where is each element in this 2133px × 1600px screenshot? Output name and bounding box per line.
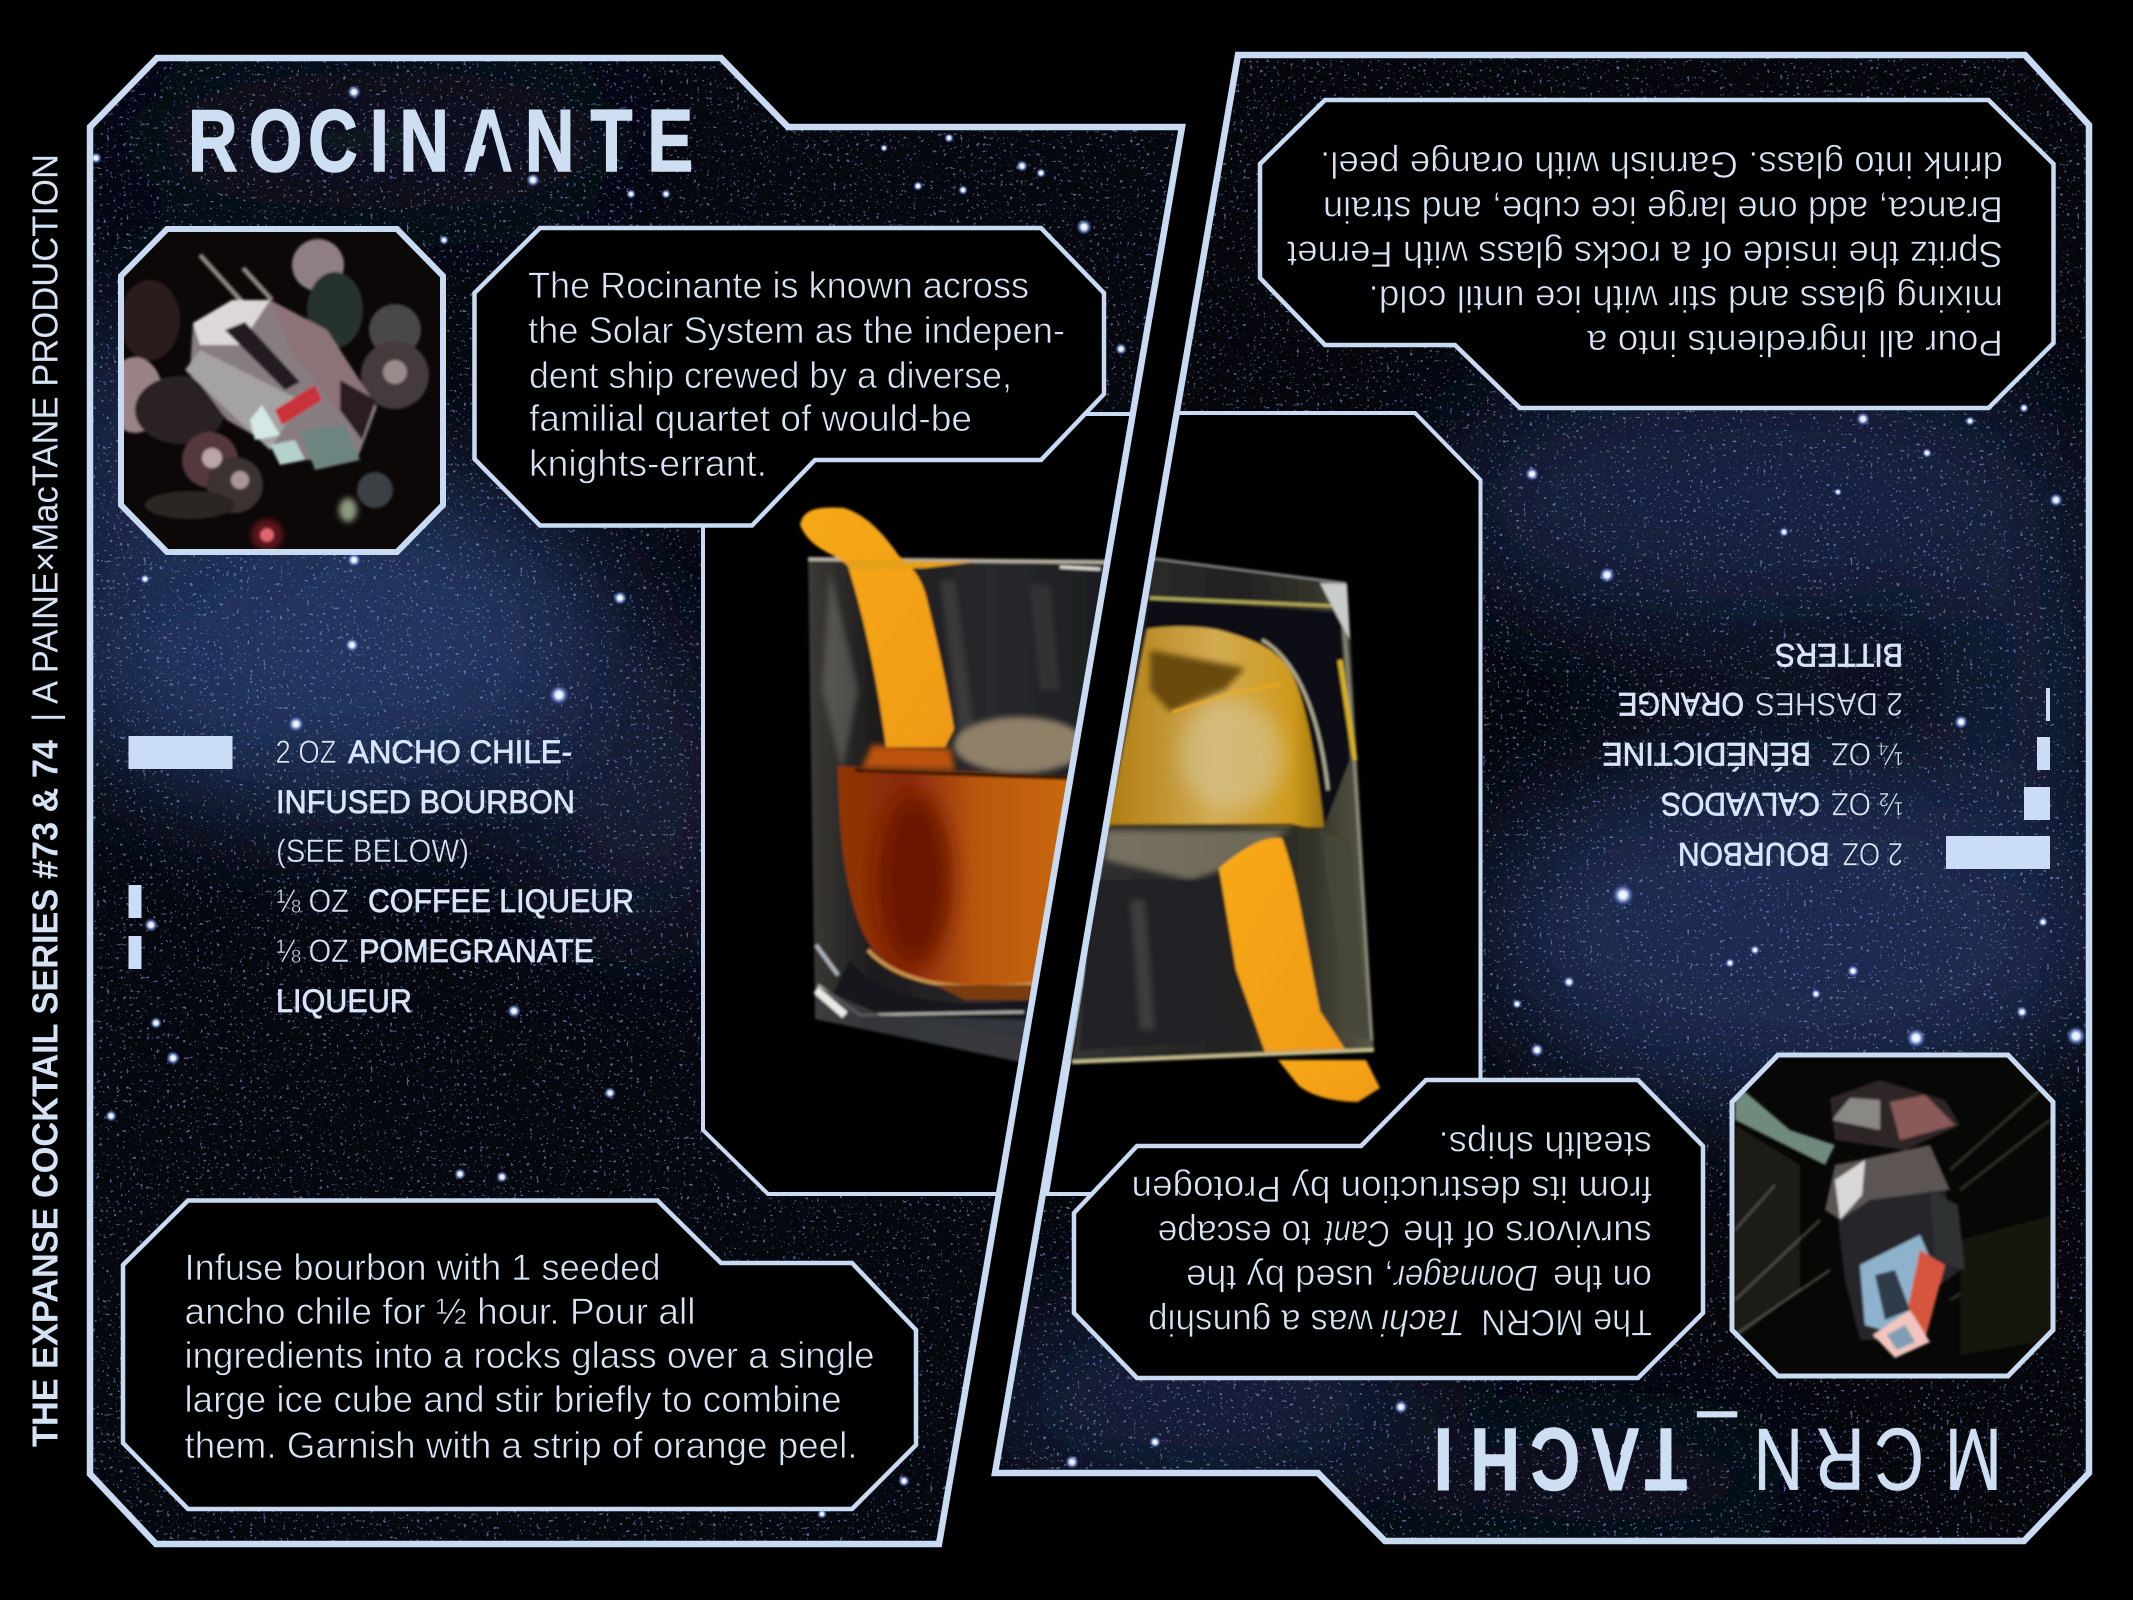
- photo: MCRN Tachi ship: [1732, 1055, 2053, 1376]
- glass base: [834, 962, 1028, 1022]
- ingredient list: Rocinante: ANCHO CHILE-: [348, 734, 572, 770]
- callout: Rocinante description: knights-errant.: [529, 443, 767, 484]
- ingredient list: Tachi (inverted): [1602, 637, 1903, 872]
- callout: Rocinante description: [474, 228, 1104, 526]
- panel: Rocinante starfield: [50, 50, 1190, 1550]
- callout: Rocinante recipe: ingredients into a rocks glass over a single: [184, 1335, 874, 1376]
- hull: [190, 300, 377, 460]
- callout: Tachi description (inverted): survivors of the: [1403, 1213, 1652, 1254]
- ingredient list: Tachi (inverted): ORANGE: [1618, 686, 1744, 722]
- photo: Rocinante ship: [107, 229, 443, 552]
- panel outline: Rocinante: [90, 58, 1182, 1544]
- title: MCRN_TACHI (inverted): TACHI: [1434, 1410, 1687, 1508]
- callout: Rocinante recipe: them. Garnish with a strip of orange peel.: [184, 1425, 858, 1466]
- callout: Tachi recipe (inverted): Pour all ingredients into a: [1587, 322, 2003, 364]
- title: ROCINANTE: ROCINANTE: [188, 92, 693, 190]
- ice above liquid: [954, 717, 1086, 773]
- hangar structure: [1735, 1083, 1835, 1165]
- callout: Rocinante description: dent ship crewed by a diverse,: [529, 355, 1012, 396]
- ingredient list: Tachi (inverted): BÉNÉDICTINE: [1602, 736, 1811, 772]
- callout: Tachi recipe (inverted): mixing glass and stir with ice until cold.: [1368, 278, 2003, 319]
- callout: Tachi description (inverted): Donnager: [1393, 1258, 1538, 1298]
- callout: Rocinante recipe: ancho chile for ½ hour. Pour all: [184, 1291, 696, 1332]
- ingredient list: Tachi (inverted): BOURBON: [1678, 836, 1830, 872]
- vertical credit line: THE EXPANSE COCKTAIL SERIES #73 & 74: [24, 740, 66, 1447]
- ingredient list: Rocinante: 2 OZ: [276, 734, 336, 770]
- amber liquid and ice: [1108, 627, 1324, 827]
- ingredient proportion bars: Rocinante: [128, 736, 232, 969]
- orange peel: [800, 508, 954, 747]
- callout: Tachi description (inverted): from its destruction by Protogen: [1132, 1168, 1652, 1210]
- title: MCRN_TACHI (inverted): MCRN_: [1697, 1410, 2002, 1508]
- ingredient list: Rocinante: ⅛ OZ: [276, 933, 349, 969]
- callout: Rocinante recipe: [123, 1200, 916, 1509]
- drums and tanks: [107, 239, 429, 519]
- callout: Rocinante recipe: large ice cube and stir briefly to combine: [184, 1379, 842, 1420]
- ingredient list: Rocinante: COFFEE LIQUEUR: [368, 883, 634, 919]
- callout: Tachi description (inverted): to escape: [1158, 1213, 1311, 1254]
- ingredient list: Tachi (inverted): 2 DASHES: [1755, 686, 1903, 722]
- vertical credit line: |: [24, 713, 66, 722]
- callout: Tachi description (inverted): Cant: [1324, 1213, 1390, 1254]
- photo: Tachi cocktail, right half of inverted glass: [1071, 557, 1380, 1102]
- ingredient list: Rocinante: (SEE BELOW): [276, 833, 469, 869]
- orange peel: [1219, 838, 1345, 1052]
- ingredient list: Rocinante: LIQUEUR: [276, 983, 412, 1019]
- callout: Rocinante description: familial quartet of would-be: [529, 398, 972, 439]
- ingredient list: Rocinante: [276, 734, 634, 1019]
- panel: Tachi starfield: [970, 50, 2120, 1550]
- black cutout: Rocinante glass bay: [703, 414, 1133, 1194]
- callout: Rocinante recipe: Infuse bourbon with 1 seeded: [184, 1247, 660, 1288]
- ingredient list: Rocinante: POMEGRANATE: [359, 933, 594, 969]
- surface and lower glass: [1110, 825, 1337, 835]
- glass body: [808, 558, 1112, 1062]
- photo: Rocinante cocktail, left half of glass: [800, 508, 1112, 1062]
- callout: Tachi description (inverted): , used by the: [1186, 1258, 1394, 1298]
- ingredient list: Tachi (inverted): CALVADOS: [1661, 786, 1820, 822]
- ingredient list: Tachi (inverted): BITTERS: [1775, 637, 1903, 673]
- ingredient proportion bars: Tachi: [1946, 688, 2050, 869]
- ingredient list: Tachi (inverted): ¼ OZ: [1831, 736, 1903, 772]
- callout: Rocinante description: the Solar System as the indepen-: [528, 310, 1065, 351]
- callout: Tachi description (inverted): [1074, 1080, 1703, 1378]
- ingredient list: Rocinante: ⅛ OZ: [276, 883, 349, 919]
- callout: Tachi recipe (inverted): Spritz the inside of a rocks glass with Fernet: [1286, 234, 2003, 274]
- title: MCRN_TACHI (inverted): [1434, 1410, 2002, 1508]
- engine flare: [260, 528, 274, 542]
- ship hull: [1830, 1080, 1960, 1150]
- top glass rim: [1150, 598, 1335, 606]
- callout: Tachi recipe (inverted): Branca, add one large ice cube, and strain: [1323, 189, 2003, 230]
- black cutout: Tachi glass bay: [1047, 413, 1480, 1194]
- liquid: [838, 766, 1070, 986]
- callout: Tachi description (inverted): The MCRN: [1481, 1302, 1652, 1343]
- vertical credit line: [24, 154, 66, 1447]
- ingredient list: Rocinante: INFUSED BOURBON: [276, 784, 575, 820]
- callout: Tachi description (inverted): stealth ships.: [1438, 1124, 1652, 1165]
- ingredient list: Tachi (inverted): ½ OZ: [1831, 786, 1903, 822]
- ingredient list: Tachi (inverted): 2 OZ: [1842, 836, 1903, 872]
- callout: Tachi recipe (inverted): [1260, 100, 2054, 408]
- callout: Tachi description (inverted): on the: [1553, 1258, 1652, 1298]
- callout: Tachi description (inverted): was a gunship: [1148, 1302, 1374, 1343]
- antennae: [200, 255, 272, 305]
- panel outline: Tachi: [995, 55, 2089, 1541]
- vertical credit line: A PAINE×MacTANE PRODUCTION: [24, 154, 66, 704]
- callout: Tachi description (inverted): Tachi: [1379, 1302, 1465, 1343]
- callout: Tachi recipe (inverted): drink into glass. Garnish with orange peel.: [1320, 144, 2003, 185]
- glass body: [1071, 557, 1374, 1062]
- rim: [808, 559, 1110, 562]
- glass foot: [1072, 1050, 1374, 1062]
- callout: Rocinante description: The Rocinante is known across: [528, 265, 1029, 306]
